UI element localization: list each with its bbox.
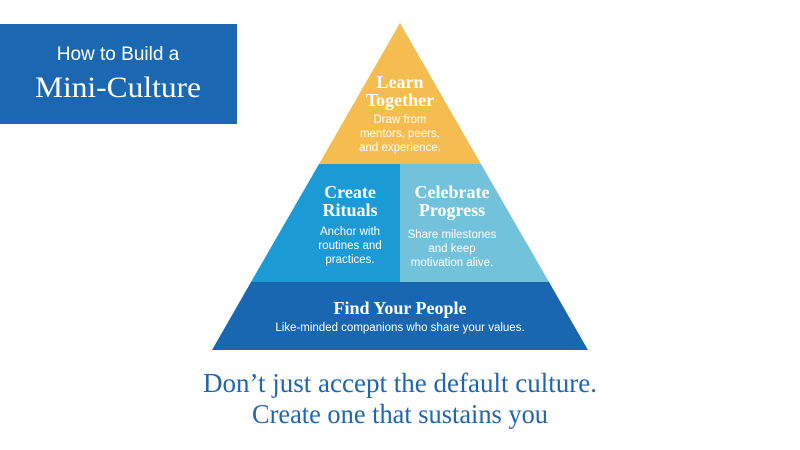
- tier: celebrate progress: motivation alive.: [411, 257, 493, 269]
- tier: find your people: Find Your People: [333, 298, 467, 318]
- tier: create rituals: Anchor with: [320, 226, 380, 238]
- tier: create rituals: Create: [324, 182, 376, 202]
- tier: create rituals: [251, 164, 400, 282]
- tier: create rituals: routines and: [318, 240, 382, 252]
- tier: celebrate progress: Progress: [419, 200, 485, 220]
- tier: learn together: and experience.: [359, 142, 441, 154]
- tier: learn together: Learn: [376, 72, 424, 92]
- tier: find your people: [212, 282, 588, 350]
- tier: create rituals: practices.: [325, 254, 375, 266]
- tier: celebrate progress: Celebrate: [415, 182, 489, 202]
- tagline: Don’t just accept the default culture.: [203, 368, 597, 398]
- title box: How to Build a: [57, 44, 180, 65]
- tier: celebrate progress: [400, 164, 549, 282]
- tier: learn together: Draw from: [373, 114, 427, 126]
- title box: [0, 24, 237, 124]
- tier: create rituals: Rituals: [322, 200, 378, 220]
- tier: celebrate progress: and keep: [428, 243, 476, 255]
- tagline: [203, 368, 597, 429]
- pyramid: [212, 23, 588, 350]
- tagline: Create one that sustains you: [252, 399, 548, 429]
- tier: find your people: Like-minded companions who share your values.: [275, 322, 525, 334]
- tier: celebrate progress: Share milestones: [408, 229, 497, 241]
- title box: Mini-Culture: [35, 71, 201, 104]
- tier: learn together: Together: [366, 90, 434, 110]
- tier: learn together: mentors, peers,: [360, 128, 440, 140]
- tier: learn together: [319, 23, 481, 164]
